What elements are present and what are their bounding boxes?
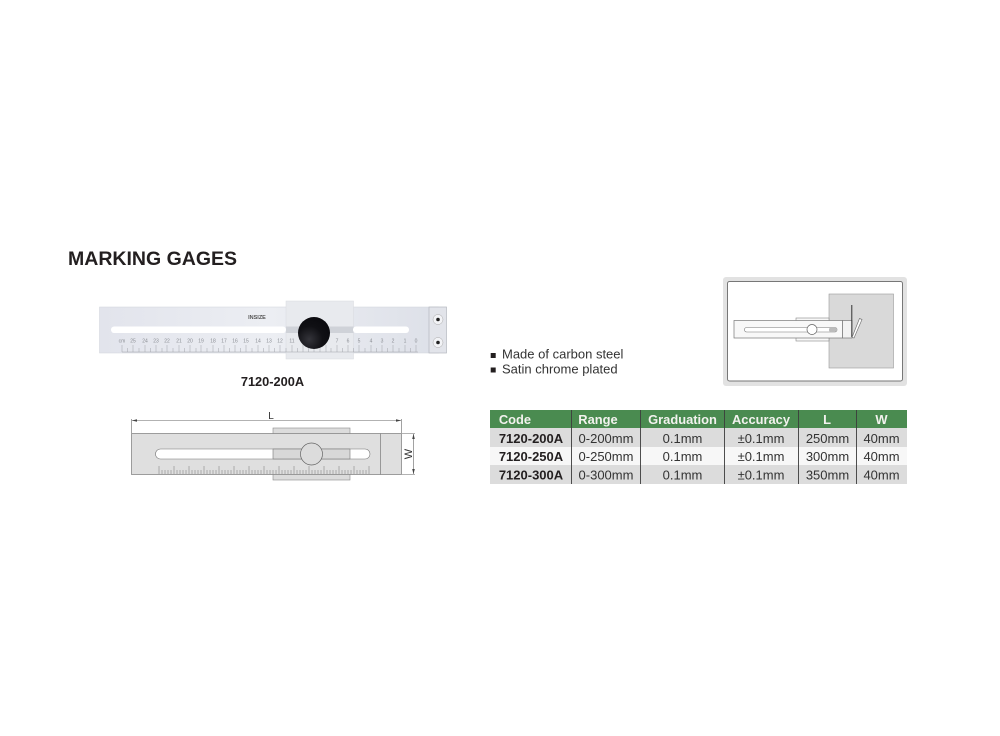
scale numbers: 6 xyxy=(347,338,350,344)
row 7120-250A: ±0.1mm xyxy=(738,449,784,464)
scale ticks xyxy=(122,345,418,352)
row 7120-200A: ±0.1mm xyxy=(738,431,784,446)
scale numbers: 11 xyxy=(289,338,295,344)
scale numbers: 1 xyxy=(404,338,407,344)
row 7120-250A: 40mm xyxy=(863,449,900,464)
row 7120-250A: 7120-250A xyxy=(499,449,564,464)
scale numbers: 2 xyxy=(392,338,395,344)
scale numbers: 12 xyxy=(277,338,283,344)
dimension L xyxy=(132,411,402,433)
scale numbers: 21 xyxy=(176,338,182,344)
row 7120-300A: 7120-300A xyxy=(499,468,564,482)
row 7120-250A: 0-250mm xyxy=(579,449,633,464)
feature list: Made of carbon steel xyxy=(502,346,624,362)
row backgrounds xyxy=(490,428,907,484)
row 7120-200A: 0-200mm xyxy=(579,431,633,446)
scale numbers: 3 xyxy=(381,338,384,344)
scale numbers: 0 xyxy=(415,338,418,344)
table header xyxy=(490,410,907,428)
feature list: Satin chrome plated xyxy=(502,362,618,376)
row 7120-250A: 0.1mm xyxy=(663,449,702,464)
row 7120-250A: 300mm xyxy=(806,449,849,464)
dimension L: L xyxy=(268,411,274,422)
row 7120-300A: 0.1mm xyxy=(663,468,702,482)
table header: Code xyxy=(499,412,531,427)
row 7120-200A: 0.1mm xyxy=(663,431,702,446)
scale numbers: 24 xyxy=(142,338,148,344)
scale numbers: 4 xyxy=(370,338,373,344)
scale numbers: 14 xyxy=(255,338,261,344)
scale numbers: 20 xyxy=(187,338,193,344)
table header: Graduation xyxy=(648,412,717,427)
dimension W xyxy=(402,434,415,474)
table header: W xyxy=(875,412,888,427)
column dividers xyxy=(572,410,856,484)
workpiece xyxy=(829,294,894,368)
scale numbers: 25 xyxy=(130,338,136,344)
row 7120-200A: 40mm xyxy=(863,431,900,446)
body xyxy=(273,428,350,480)
table header: L xyxy=(823,412,831,427)
title: MARKING GAGES xyxy=(68,248,237,270)
scale numbers: cm xyxy=(119,338,125,344)
row 7120-200A xyxy=(499,431,900,446)
slot xyxy=(111,326,409,333)
brand mark: INSIZE xyxy=(248,315,266,321)
scale ticks xyxy=(159,466,369,474)
product photo: marking gage xyxy=(100,301,446,359)
product code label: 7120-200A xyxy=(241,374,304,389)
scale numbers: 7 xyxy=(336,338,339,344)
row 7120-300A: 40mm xyxy=(863,468,900,482)
slot xyxy=(156,449,370,459)
usage diagram panel xyxy=(723,277,907,386)
row 7120-300A: 0-300mm xyxy=(579,468,633,482)
table header: Range xyxy=(578,412,618,427)
scale numbers: 23 xyxy=(153,338,159,344)
feature list xyxy=(491,346,624,376)
row 7120-200A: 250mm xyxy=(806,431,849,446)
row 7120-300A xyxy=(499,468,900,482)
scale numbers: 13 xyxy=(266,338,272,344)
table header: Accuracy xyxy=(732,412,791,427)
scale numbers: 18 xyxy=(210,338,216,344)
sliding block xyxy=(286,301,354,359)
scale numbers: 16 xyxy=(232,338,238,344)
dimension drawing xyxy=(132,411,415,480)
scale numbers: 15 xyxy=(243,338,249,344)
row 7120-200A: 7120-200A xyxy=(499,431,564,446)
scale numbers: 17 xyxy=(221,338,227,344)
scale numbers: 22 xyxy=(164,338,170,344)
knob xyxy=(298,317,330,349)
knob outline xyxy=(300,443,322,465)
row 7120-250A xyxy=(499,449,900,464)
dimension W: W xyxy=(403,448,415,459)
scale numbers: 5 xyxy=(358,338,361,344)
spec table xyxy=(490,410,907,484)
end stop xyxy=(429,307,446,353)
tool in diagram xyxy=(734,305,862,341)
scale numbers: 19 xyxy=(198,338,204,344)
row 7120-300A: 350mm xyxy=(806,468,849,482)
row 7120-300A: ±0.1mm xyxy=(738,468,784,482)
